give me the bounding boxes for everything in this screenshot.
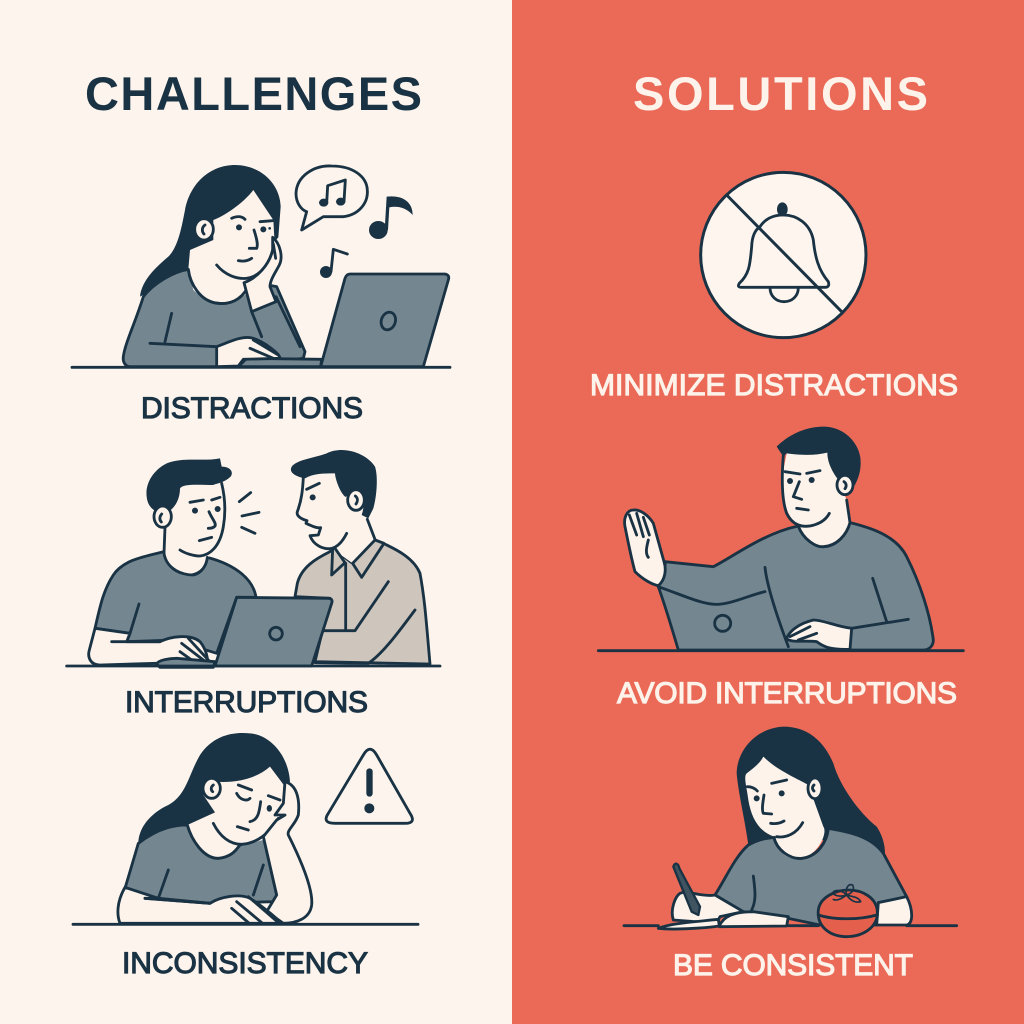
icon: tomato timer (818, 885, 877, 937)
panel: challenges (0, 0, 512, 1024)
illustration: woman distracted by music at laptop (72, 165, 450, 367)
icon: warning triangle (326, 749, 412, 823)
icon: raised stop hand (625, 510, 665, 586)
icon: open notebook (658, 912, 788, 929)
illustration: tired woman leaning on her hand (73, 733, 418, 924)
heading: solutions: SOLUTIONS (633, 67, 928, 120)
icon: pen (673, 864, 700, 915)
panel: solutions (512, 0, 1024, 1024)
icon: small music note (320, 249, 347, 278)
label: inconsistency: INCONSISTENCY (122, 947, 368, 980)
icon: laptop (321, 274, 449, 367)
label: minimize distractions: MINIMIZE DISTRACTIONS (590, 369, 958, 402)
icon: laptop (215, 597, 332, 666)
label: be consistent: BE CONSISTENT (673, 949, 913, 982)
label: interruptions: INTERRUPTIONS (125, 686, 368, 719)
illustration: man raising his hand to stop interruptions (598, 427, 963, 651)
icon: speech bubble with music note (296, 166, 367, 230)
illustration: colleague interrupting man at laptop (67, 450, 440, 667)
icon: large music note (369, 196, 413, 239)
label: avoid interruptions: AVOID INTERRUPTIONS (617, 677, 957, 710)
label: distractions: DISTRACTIONS (141, 392, 363, 425)
heading: challenges: CHALLENGES (85, 67, 422, 120)
icon: interruption lines (239, 493, 259, 533)
illustration: woman writing with tomato timer (624, 727, 957, 937)
icon: crossed-out notification bell (701, 172, 866, 338)
